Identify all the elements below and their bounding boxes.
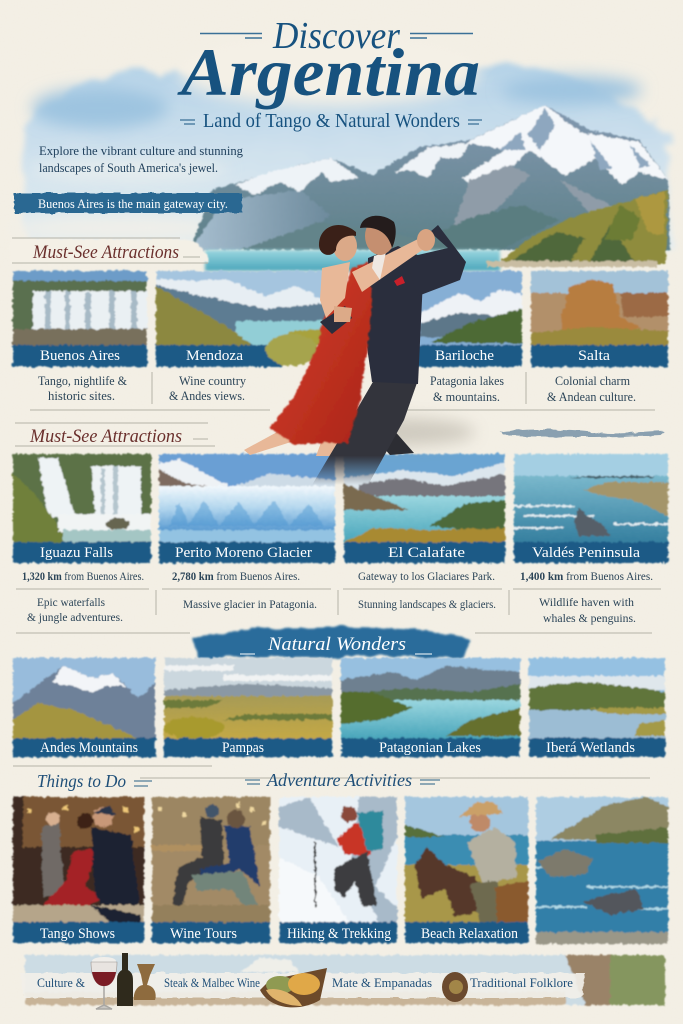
facts: Valdés Peninsula (520, 569, 653, 625)
facts: Iguazu Falls (22, 569, 144, 624)
man's head (365, 217, 395, 255)
description: Bariloche: & mountains. (433, 390, 500, 404)
row 4 cards (13, 797, 668, 944)
section header: Natural Wonders (192, 627, 470, 657)
description: Salta: Colonial charm (555, 374, 630, 388)
heading: must-see attractions 2 (15, 423, 215, 447)
description: Buenos Aires (38, 374, 127, 403)
card: whale watching coast (536, 797, 668, 944)
row 2 facts and descriptions (16, 569, 661, 633)
forested hillside (487, 190, 668, 267)
card: El Calafate: El Calafate (388, 545, 465, 561)
description: Salta (547, 374, 636, 404)
man's front leg (312, 380, 418, 485)
card: El Calafate (344, 454, 505, 563)
card: Perito Moreno Glacier: Perito Moreno Glacier (175, 545, 312, 561)
row 1 cards (13, 271, 668, 367)
card: Bariloche (400, 271, 522, 367)
card: Bariloche: Bariloche (435, 348, 494, 364)
row 2 cards (13, 454, 668, 563)
labels: Mate & Empanadas (332, 976, 432, 990)
hero landscape: sky, mountains and lake (10, 38, 670, 271)
facts: Iguazu Falls: 1,320 km from Buenos Aires. (22, 569, 144, 583)
label band (20, 973, 585, 998)
labels: Traditional Folklore (470, 976, 573, 990)
card: Wine Tours (152, 797, 270, 943)
facts: Perito Moreno Glacier (172, 569, 317, 611)
icon: wine bottle (117, 953, 133, 1006)
card: Iguazu Falls: Iguazu Falls (40, 545, 113, 561)
description: Bariloche: Patagonia lakes (430, 374, 504, 388)
card: Andes Mountains (13, 658, 155, 757)
card: Mendoza: Mendoza (186, 348, 243, 364)
woman's arm (352, 238, 428, 292)
facts: El Calafate (358, 569, 496, 611)
facts: El Calafate: Gateway to los Glaciares Park. (358, 569, 495, 583)
facts: Valdés Peninsula: whales & penguins. (543, 611, 636, 625)
card: Buenos Aires (13, 271, 147, 367)
brush wave (500, 430, 665, 437)
row 1 descriptions (30, 372, 655, 410)
description: Buenos Aires: historic sites. (48, 389, 115, 403)
description: Salta: & Andean culture. (547, 390, 636, 404)
section heading: Things to Do (13, 766, 212, 791)
card: Iberá Wetlands (529, 658, 665, 757)
card: Patagonian Lakes: Patagonian Lakes (379, 740, 481, 756)
card: Salta: Salta (578, 348, 610, 364)
heading: must-see attractions 1: Must-See Attractions (32, 242, 179, 263)
facts: Iguazu Falls: & jungle adventures. (27, 610, 123, 624)
card: Hiking and Trekking: Hiking & Trekking (287, 926, 391, 942)
section heading: Adventure Activities: Adventure Activities (266, 770, 412, 790)
subtitle: Land of Tango & Natural Wonders (203, 110, 460, 132)
man's jacket (366, 246, 424, 384)
description: Mendoza: Wine country (179, 374, 247, 388)
title: Discover: Discover (272, 15, 400, 57)
card: Iguazu Falls (13, 454, 151, 563)
icon: mate gourd (442, 972, 468, 1002)
card: Patagonian Lakes (341, 658, 520, 757)
row 3 cards (13, 658, 665, 757)
facts: Valdés Peninsula: Wildlife haven with (539, 595, 634, 609)
heading: must-see attractions 1 (10, 238, 210, 264)
clasped hands (417, 229, 435, 251)
description: Bariloche (430, 374, 504, 404)
mountains (190, 105, 670, 250)
description: Buenos Aires: Tango, nightlife & (38, 374, 127, 388)
card: Valdés Peninsula (514, 454, 668, 563)
gateway banner (14, 193, 242, 213)
card: Tango Shows (13, 797, 144, 943)
man's hand on her back (320, 306, 352, 334)
man's raised arm (405, 225, 466, 296)
card: Perito Moreno Glacier (159, 454, 335, 563)
labels: Steak & Malbec Wine (164, 976, 260, 990)
card: Beach Relaxation (405, 797, 528, 943)
tango couple (244, 216, 475, 485)
card: Iberá Wetlands: Iberá Wetlands (546, 740, 635, 756)
gateway banner: Buenos Aires is the main gateway city. (38, 196, 228, 211)
card: Hiking and Trekking (279, 797, 397, 943)
section heading: Things to Do: Things to Do (37, 771, 126, 791)
intro text: Explore the vibrant culture and stunning (39, 143, 243, 158)
smoke under dancers (325, 418, 475, 446)
section heading: Adventure Activities (140, 770, 650, 790)
facts: Perito Moreno Glacier: 2,780 km from Buenos Aires. (172, 569, 300, 583)
red dress (270, 262, 372, 445)
card: Wine Tours: Wine Tours (170, 926, 237, 942)
card: Buenos Aires: Buenos Aires (40, 348, 120, 364)
bottom strip: food and culture (20, 953, 665, 1009)
title: Argentina: Argentina (177, 34, 480, 110)
labels (37, 976, 573, 990)
icon: wine glass (91, 957, 117, 1009)
title: Discover (200, 15, 473, 57)
facts: Perito Moreno Glacier: Massive glacier in Patagonia. (183, 597, 317, 611)
woman's head (333, 231, 357, 261)
intro text: landscapes of South America's jewel. (39, 160, 218, 175)
facts: Valdés Peninsula: 1,400 km from Buenos Aires. (520, 569, 653, 583)
card: Andes Mountains: Andes Mountains (40, 740, 138, 756)
card: Valdés Peninsula: Valdés Peninsula (532, 545, 640, 561)
section header: Natural Wonders: Natural Wonders (267, 634, 406, 655)
card: Salta (531, 271, 668, 367)
icon: empanada bowl (260, 968, 327, 1007)
card: Pampas: Pampas (222, 740, 264, 756)
facts: Iguazu Falls: Epic waterfalls (37, 595, 105, 609)
facts: El Calafate: Stunning landscapes & glaciers. (358, 597, 496, 611)
card: Pampas (164, 658, 332, 757)
shirt and red pocket (372, 252, 386, 280)
description: Mendoza: & Andes views. (169, 389, 245, 403)
labels: Culture & (37, 976, 85, 990)
heading: must-see attractions 2: Must-See Attractions (29, 426, 182, 447)
description: Mendoza (169, 374, 247, 403)
woman's legs (244, 425, 340, 456)
card: Tango Shows: Tango Shows (40, 926, 115, 942)
icon: small cup (134, 964, 156, 1000)
lake (205, 250, 500, 271)
woman's back (320, 262, 350, 318)
card: Beach Relaxation: Beach Relaxation (421, 926, 518, 942)
sky with clouds (10, 38, 670, 250)
intro text (39, 143, 243, 175)
man's back leg (368, 420, 414, 455)
card: Mendoza (156, 271, 326, 367)
strip background (25, 955, 665, 1005)
